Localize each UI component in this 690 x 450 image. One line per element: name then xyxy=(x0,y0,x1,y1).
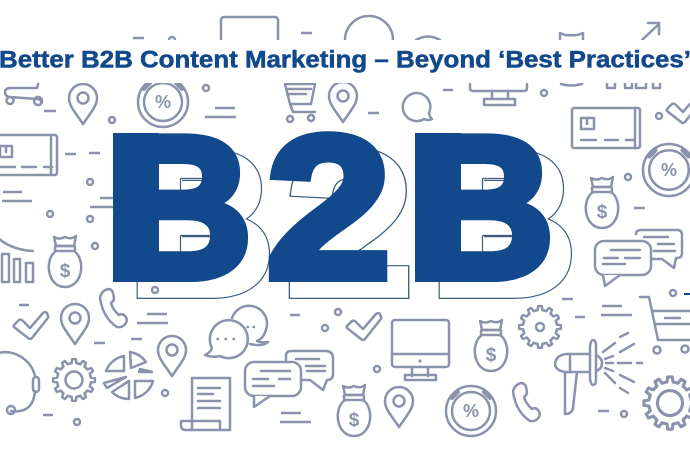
icon: percent ring bottom xyxy=(446,386,496,436)
icon: growth arrow xyxy=(642,23,659,40)
B2B solid lettering: B xyxy=(108,94,253,321)
shadow outline edge: B xyxy=(129,110,274,337)
icon: money bag centre right xyxy=(475,320,507,371)
icon: small squares xyxy=(607,83,660,88)
icon: document xyxy=(181,378,230,430)
icon: gear right xyxy=(644,377,690,429)
icon: chat bubbles xyxy=(205,306,268,358)
percent glyph bottom: % xyxy=(463,401,479,421)
icon: card right xyxy=(572,108,640,148)
icon: top screen xyxy=(221,17,278,57)
icon: cart lower right xyxy=(640,297,690,354)
percent glyph: % xyxy=(155,92,171,112)
icon: phone right xyxy=(513,383,540,421)
icon: percent ring top left xyxy=(138,77,188,127)
short lines xyxy=(2,90,645,422)
title band xyxy=(0,40,690,83)
shadow white body: 2 xyxy=(287,111,412,337)
icon: chat lower xyxy=(245,351,333,407)
icon: percent ring right xyxy=(643,144,690,196)
icon: shopping cart xyxy=(285,84,315,122)
icon: chats top right xyxy=(595,230,682,286)
title: Better B2B Content Marketing – Beyond ‘Best Practices’ xyxy=(0,46,690,74)
icon: check lower left xyxy=(14,312,48,339)
icon: top circle xyxy=(345,16,393,64)
icon: check top right xyxy=(667,96,690,123)
icon: pie chart xyxy=(104,352,153,399)
icon: saw gear xyxy=(519,306,561,348)
icon: small cart xyxy=(5,84,42,105)
dollar: $ xyxy=(486,345,497,366)
icon: money bag left xyxy=(49,236,81,287)
icon: check centre xyxy=(347,313,381,340)
icon: monitor xyxy=(392,320,449,380)
shadow counter corrections xyxy=(160,172,522,272)
B2B solid lettering xyxy=(108,94,555,321)
shadow outline edge: 2 xyxy=(287,111,412,337)
icon: phone left xyxy=(100,289,127,327)
B2B solid lettering: B xyxy=(410,94,555,321)
icon: speech bubble xyxy=(403,93,432,121)
icon: pin bottom xyxy=(385,387,413,427)
icon: monitor bottom xyxy=(470,84,527,105)
icon: pin pie side xyxy=(158,336,186,376)
B2B outlined shadow lettering xyxy=(129,110,576,337)
icon: card left xyxy=(0,135,57,175)
dark accent dash xyxy=(684,293,690,295)
B2B solid lettering: 2 xyxy=(266,95,391,321)
icon: trend and bars xyxy=(0,238,33,282)
small dots xyxy=(47,85,676,425)
dollar bottom: $ xyxy=(349,410,360,431)
shadow white body xyxy=(129,110,576,337)
icon: dot in shadow letter xyxy=(152,287,158,293)
monitor dot xyxy=(418,359,422,363)
shadow outline edge: B xyxy=(431,110,576,337)
dollar right: $ xyxy=(597,202,608,223)
shadow outline edge xyxy=(129,110,576,337)
icon: pin middle xyxy=(329,82,357,122)
B stem thickening xyxy=(113,133,461,282)
icon: money bag right xyxy=(586,177,618,228)
icon: pin left xyxy=(69,84,97,124)
top dashes xyxy=(133,33,312,38)
icon: headset xyxy=(0,352,39,414)
dollar left: $ xyxy=(60,261,71,282)
shadow white body: B xyxy=(129,110,274,337)
icon: top dot xyxy=(169,37,175,43)
icon: top gear fragment xyxy=(416,36,440,40)
percent glyph right: % xyxy=(661,160,677,180)
icon: arc fragment xyxy=(561,84,582,86)
icon: top bag fragment xyxy=(560,33,583,40)
icon: gear left xyxy=(53,359,95,401)
icon: pin lower left xyxy=(61,304,89,344)
icon: money bag bottom xyxy=(338,385,370,436)
icon: megaphone xyxy=(555,333,642,414)
shadow white body: B xyxy=(431,110,576,337)
